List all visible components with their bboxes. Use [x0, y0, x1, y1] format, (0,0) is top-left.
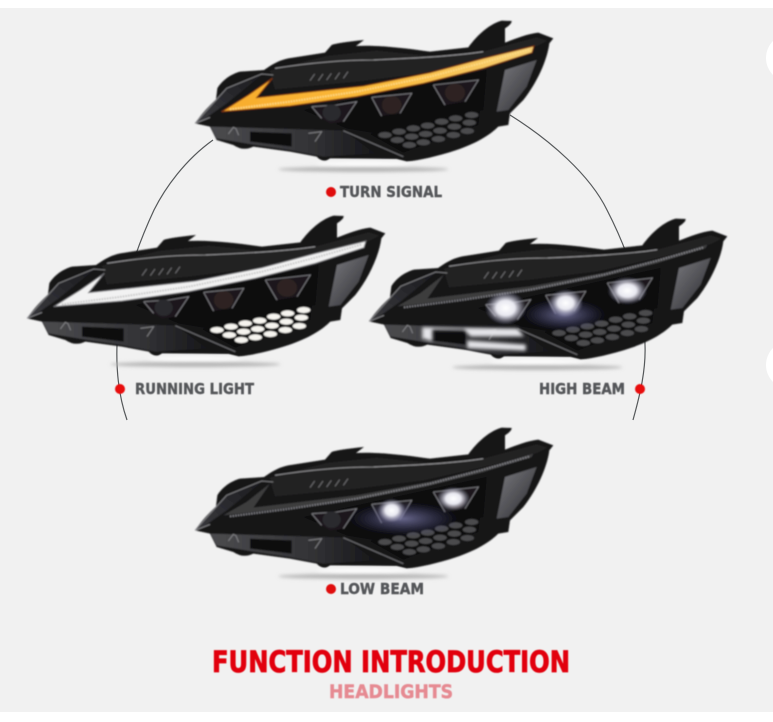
blue haze — [347, 501, 460, 536]
amber turn signal strip — [222, 46, 534, 112]
title: FUNCTION INTRODUCTION — [212, 645, 570, 679]
lit projector lenses — [378, 487, 470, 522]
blue haze — [521, 298, 607, 331]
subtitle: HEADLIGHTS — [329, 681, 453, 703]
label: low beam: LOW BEAM — [340, 580, 424, 598]
label: high beam: HIGH BEAM — [539, 380, 625, 398]
white running light strip — [54, 241, 366, 307]
carousel button: lower right — [766, 341, 773, 389]
headlight: running light — [27, 216, 385, 367]
dimmed strip — [397, 245, 707, 307]
label: turn signal: TURN SIGNAL — [340, 183, 442, 201]
carousel button: upper right — [766, 34, 773, 82]
headlight: turn signal — [195, 21, 553, 172]
headlight: low beam — [195, 428, 553, 579]
lit projector lenses — [485, 277, 647, 325]
dimmed strip — [223, 454, 533, 516]
label: running light: RUNNING LIGHT — [135, 380, 255, 398]
connector arc: right — [510, 115, 645, 420]
lit lower light bar — [422, 327, 526, 351]
connector arc: left — [117, 140, 213, 420]
headlight: high beam — [369, 219, 727, 370]
